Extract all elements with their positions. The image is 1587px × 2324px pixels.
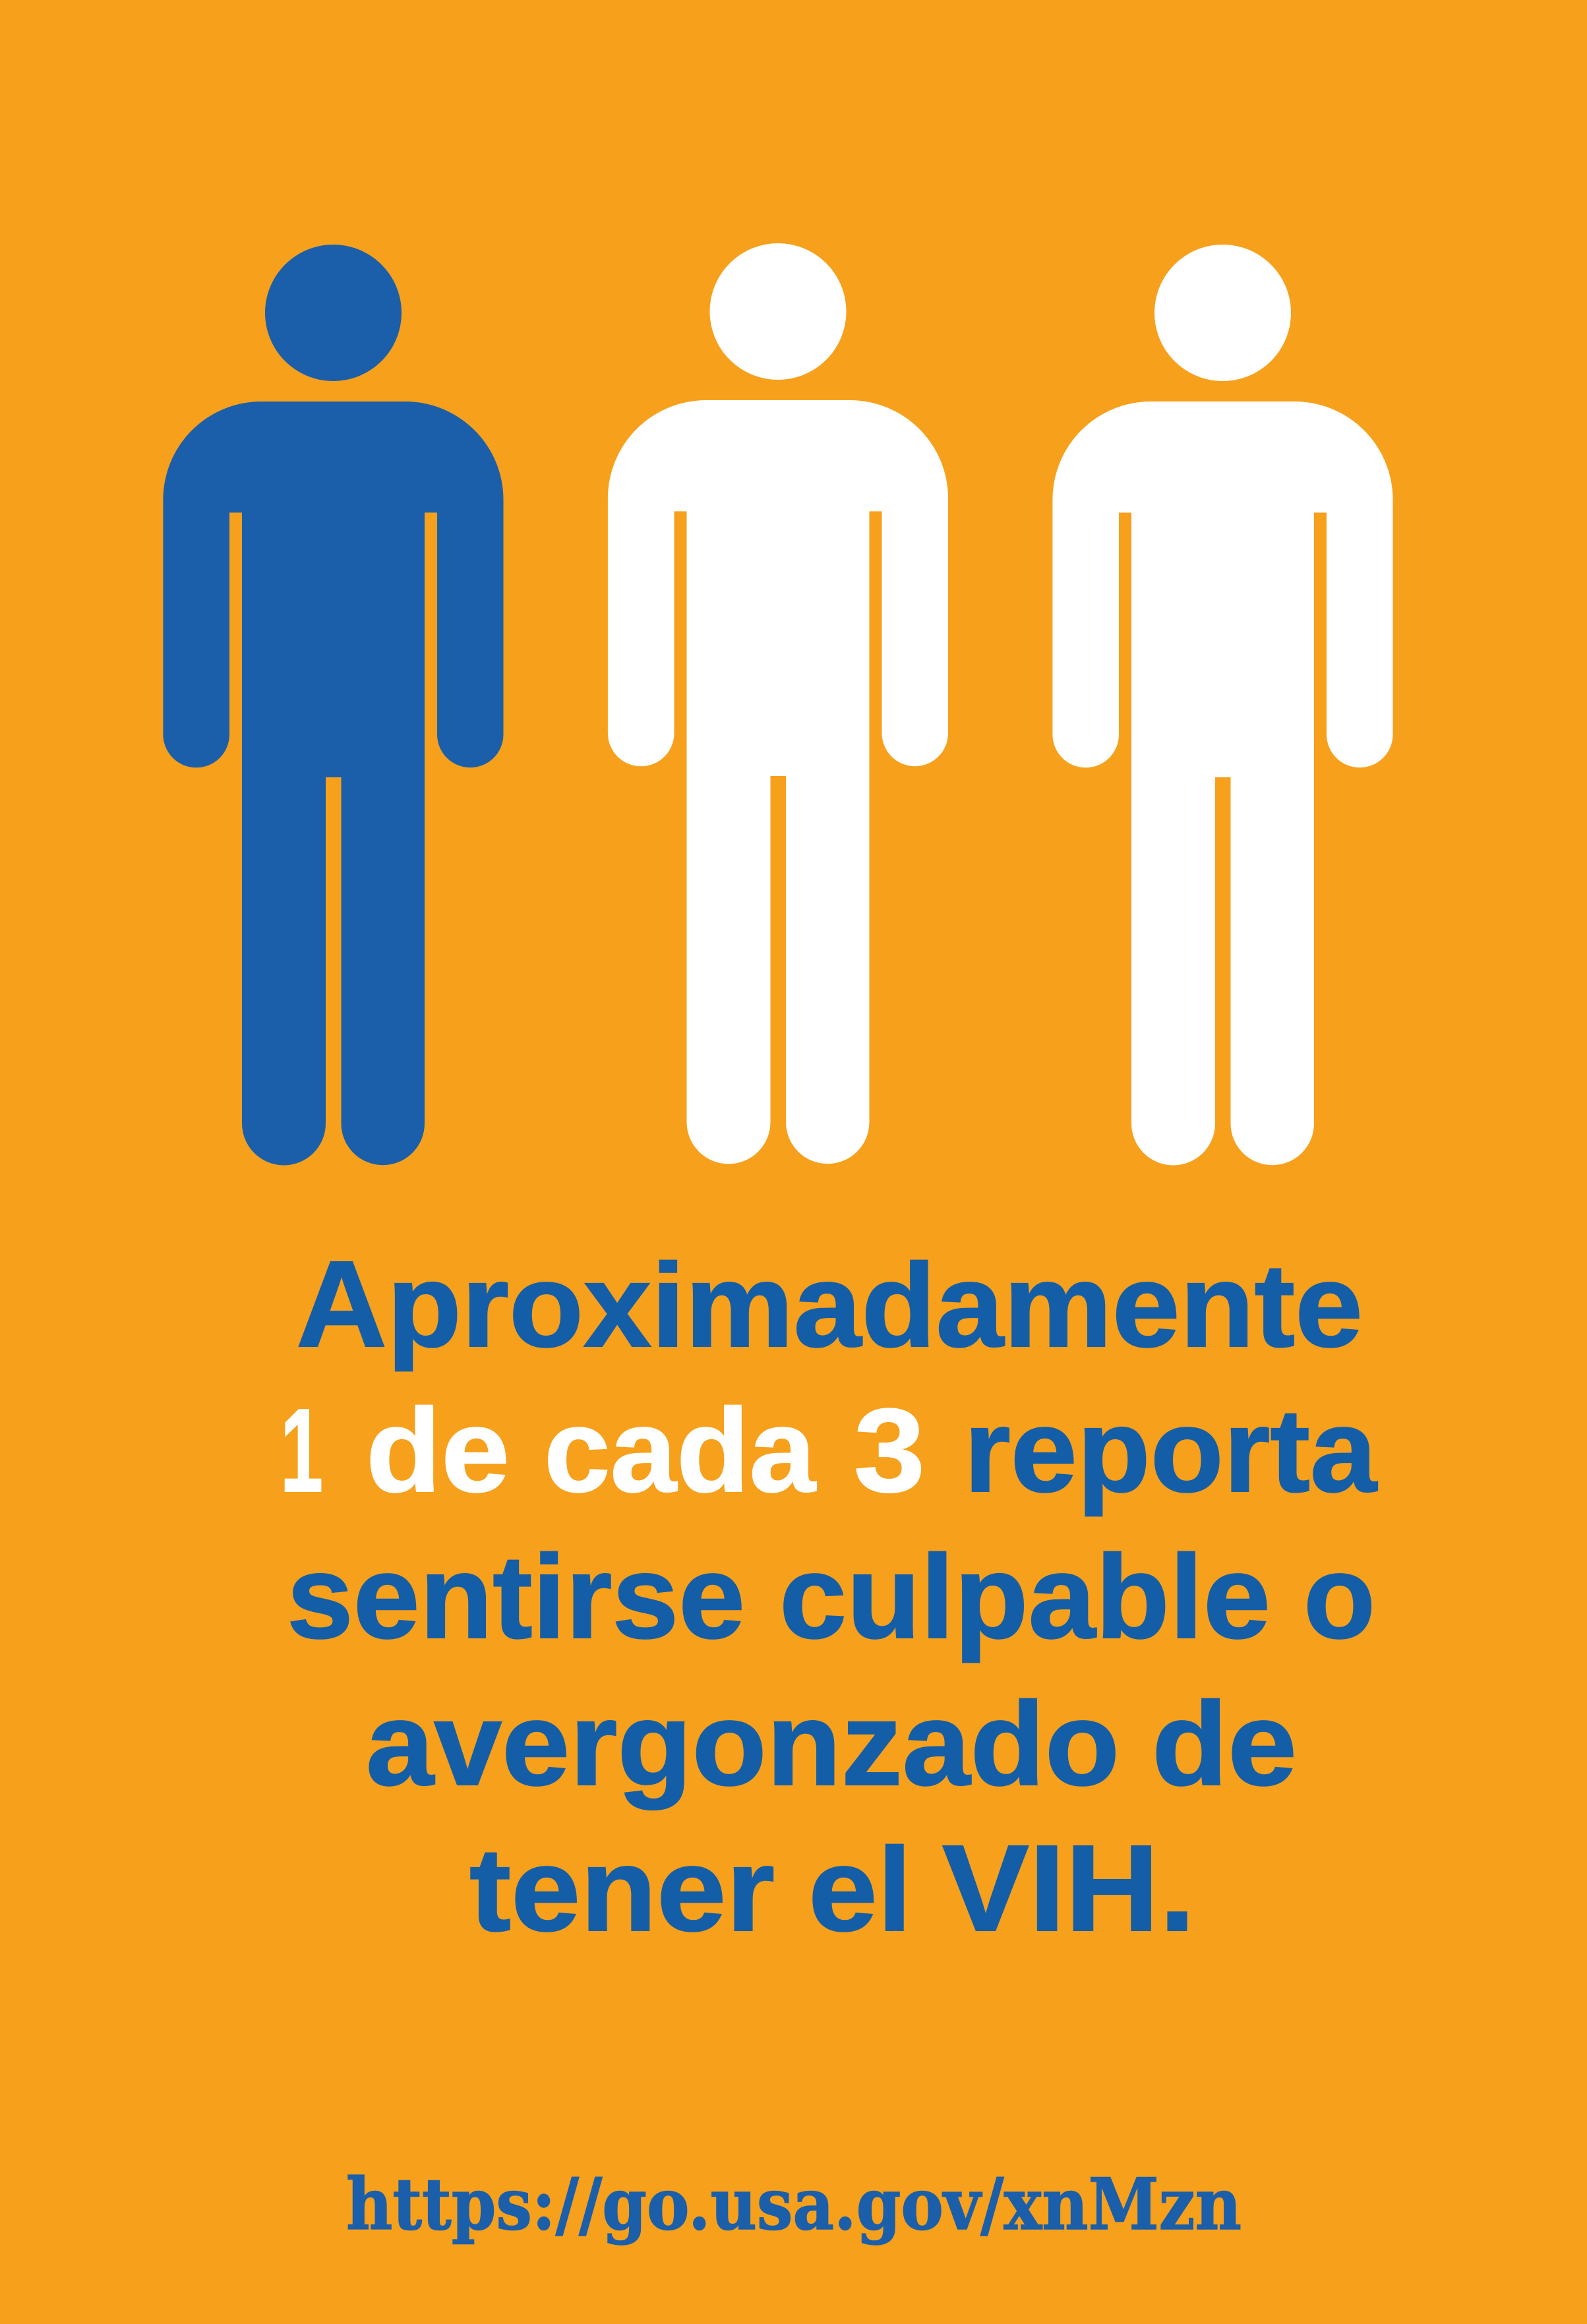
line 5	[469, 1820, 1195, 1957]
icon: white person 3	[1052, 245, 1392, 1166]
line 2: highlighted statistic	[280, 1385, 925, 1517]
line 2: continuation: reporta	[964, 1385, 1378, 1517]
line 3: culpable	[779, 1531, 1271, 1663]
line 3	[287, 1531, 1375, 1663]
line 5: tener	[469, 1824, 775, 1956]
line 2: highlighted statistic: 1	[280, 1385, 323, 1517]
line 1: Aproximadamente	[296, 1236, 1363, 1373]
line 4: avergonzado	[366, 1678, 1120, 1810]
line 3: sentirse	[287, 1531, 745, 1663]
icon: white person 2	[608, 243, 948, 1164]
line 2: highlighted statistic: de	[366, 1385, 510, 1517]
line 5: VIH.	[942, 1820, 1195, 1957]
line 5: el	[808, 1824, 912, 1956]
statement text block	[280, 1236, 1378, 1957]
icon: blue person	[163, 245, 503, 1166]
line 2: highlighted statistic: cada	[544, 1385, 817, 1517]
line 2: highlighted statistic: 3	[854, 1385, 925, 1517]
source URL: https://go.usa.gov/xnMzn	[346, 2163, 1242, 2246]
line 4: de	[1152, 1678, 1297, 1810]
line 3: o	[1303, 1531, 1375, 1663]
